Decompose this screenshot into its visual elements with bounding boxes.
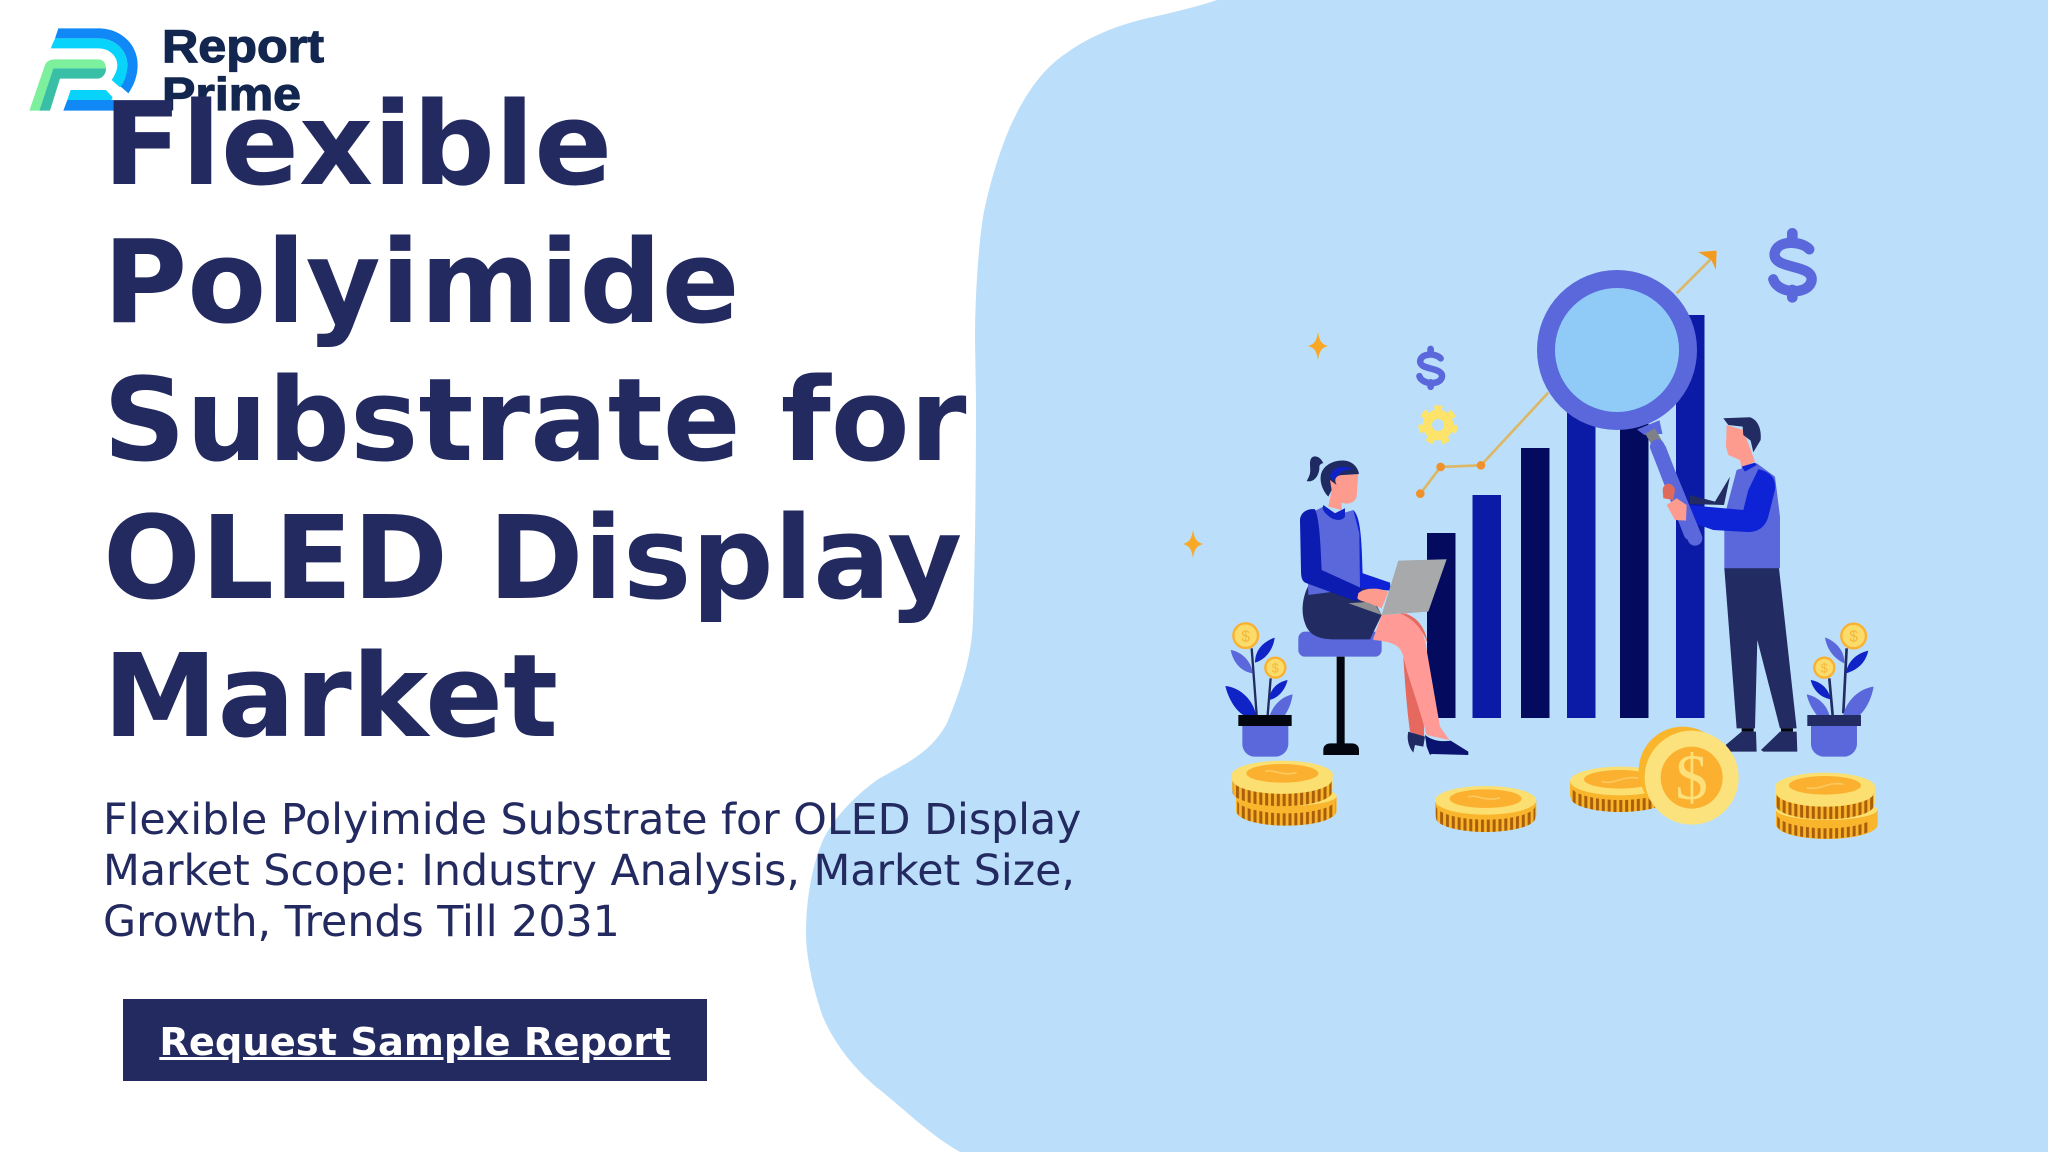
large dollar coin: $ [1675,742,1708,814]
magnifying glass [1546,279,1691,533]
icon: large dollar [1773,233,1812,297]
legs and shoes [1303,583,1468,755]
potted plant left: $ [1241,628,1250,645]
subtitle: Market Scope: Industry Analysis, Market Size, [103,846,1075,896]
subtitle: Growth, Trends Till 2031 [103,897,620,947]
title: Flexible [103,78,612,212]
logo wordmark [162,20,324,120]
potted plant left [1225,623,1293,757]
logo wordmark: Report [162,20,324,72]
logo [29,20,324,120]
potted plant right [1807,624,1874,757]
trousers and shoes [1724,568,1797,752]
background blob [806,0,2048,1152]
torso, head and laptop [1300,456,1447,615]
illustration [1183,233,1878,839]
icon: gear [1421,408,1455,442]
potted plant right: $ [1821,661,1828,675]
large dollar coin [1639,727,1739,825]
stool [1298,632,1382,755]
potted plant left: $ [1272,661,1279,675]
subtitle [103,795,1081,947]
coin behind large coin [1570,767,1670,812]
title: Market [103,630,558,764]
title: Substrate for [103,354,967,488]
potted plant right: $ [1849,629,1858,646]
logo wordmark: Prime [162,68,301,120]
title: Polyimide [103,216,740,350]
button: request sample report [123,999,707,1081]
subtitle: Flexible Polyimide Substrate for OLED Display [103,795,1081,845]
icon: sparkle top [1308,332,1328,360]
upper body [1657,417,1780,568]
man with magnifier [1657,417,1797,752]
coin stack right [1775,773,1878,839]
coin stack left [1232,761,1337,826]
bar chart [1427,315,1704,718]
trend line with arrow [1416,251,1717,498]
icon: sparkle left [1183,530,1203,558]
coin single middle [1435,786,1536,832]
title: OLED Display [103,492,962,626]
woman with laptop [1298,456,1468,755]
title [103,78,967,764]
logo mark [29,28,138,111]
icon: small dollar [1419,349,1442,387]
button: request sample report: Request Sample Report [159,1020,671,1065]
